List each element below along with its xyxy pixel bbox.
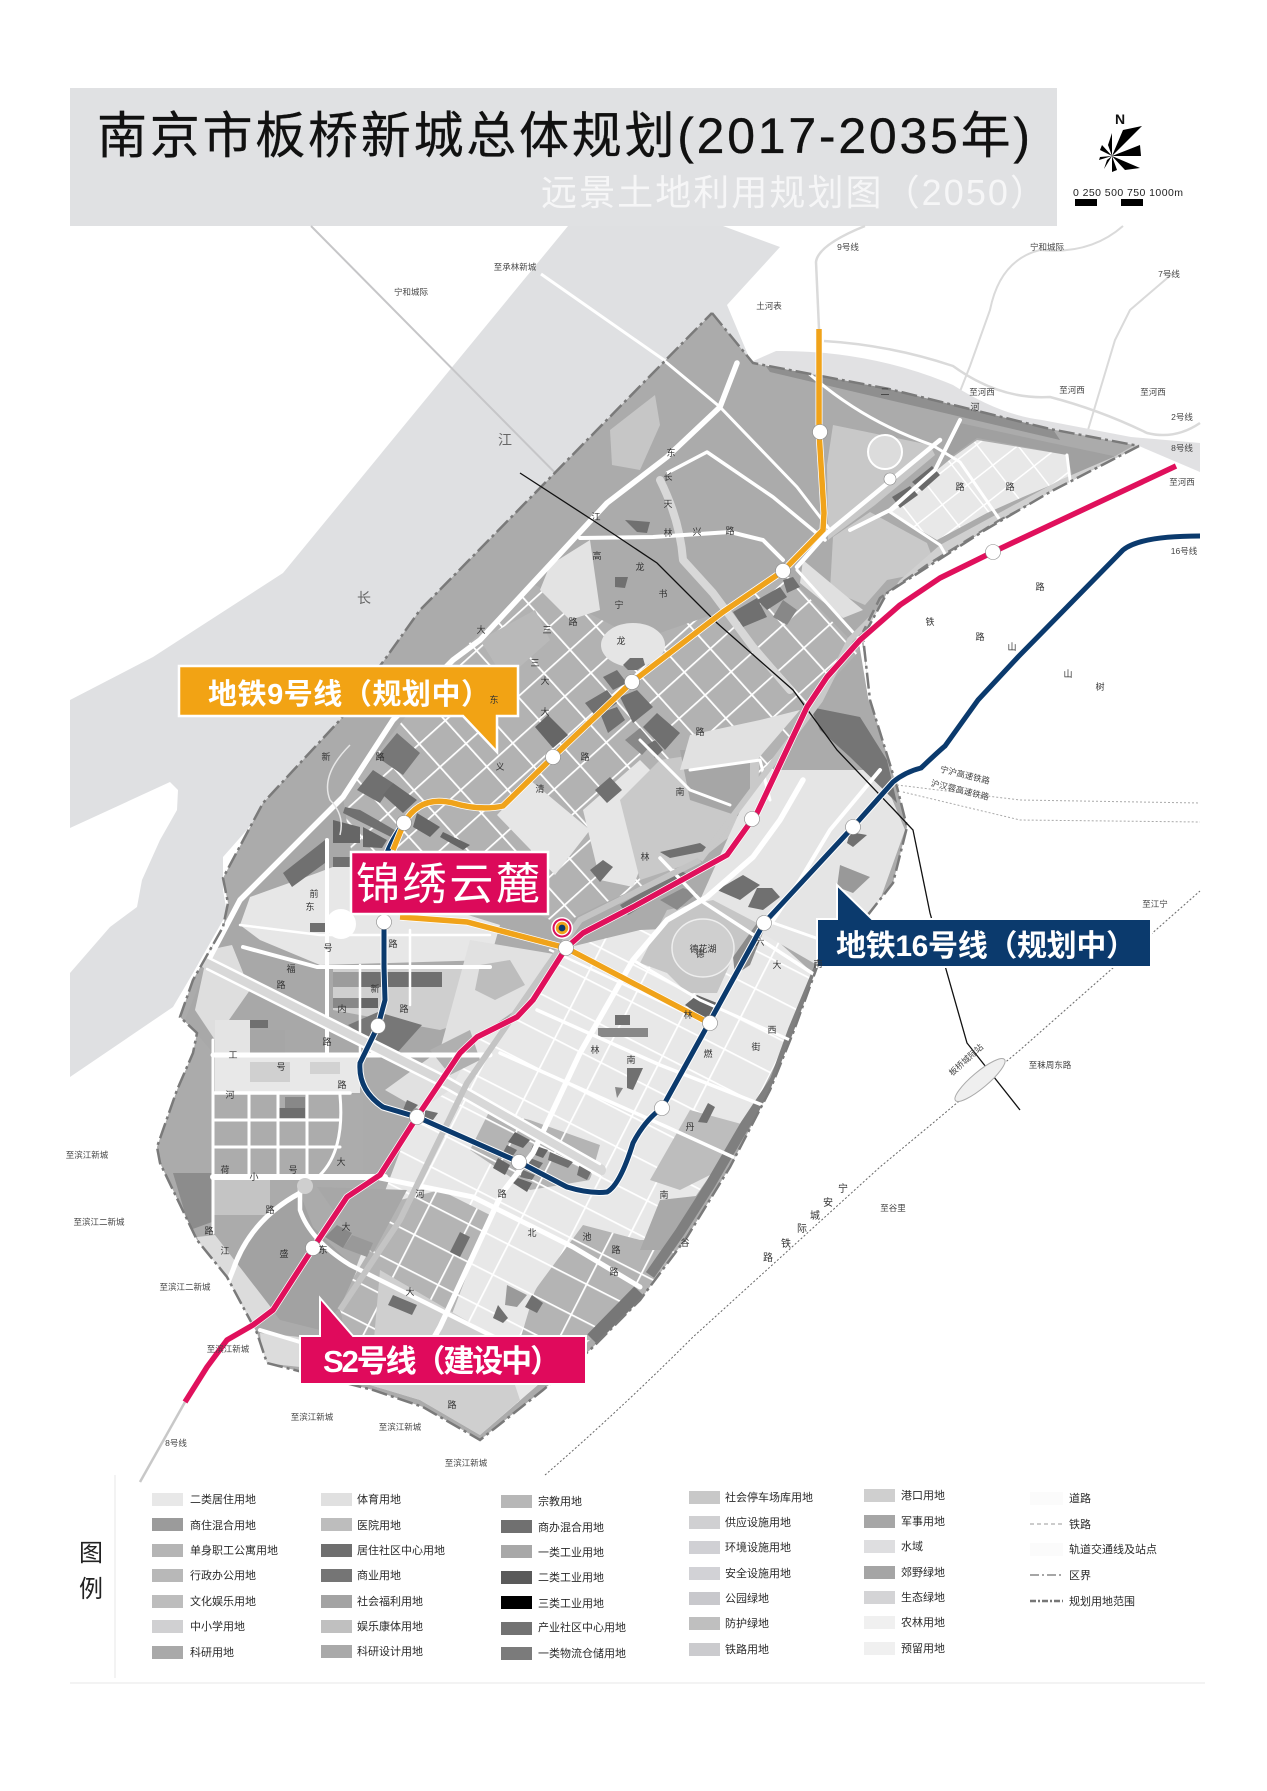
road name labels: 丹 — [685, 1122, 695, 1132]
road name labels: 宁 — [614, 599, 624, 610]
road name labels: 林 — [590, 1044, 600, 1055]
zone: north west light parcel — [540, 540, 600, 620]
outer place labels: 7号线 — [1158, 269, 1180, 279]
outer place labels: 2号线 — [1171, 412, 1193, 422]
legend column 1: 行政办公用地 — [190, 1568, 256, 1582]
road name labels: 路 — [497, 1188, 507, 1199]
zone: north east dark river band — [765, 365, 1060, 440]
legend column 5: 预留用地 — [901, 1642, 945, 1655]
road name labels: 铁 — [925, 616, 935, 627]
legend column 2: 科研设计用地 — [357, 1644, 423, 1658]
road name labels: 小 — [249, 1172, 259, 1182]
legend column 1: 单身职工公寓用地 — [190, 1543, 278, 1557]
road name labels: 树 — [1095, 681, 1105, 692]
zone: north east oval — [868, 435, 902, 469]
road name labels: 路 — [375, 751, 385, 762]
road name labels: 新 — [370, 983, 380, 994]
road name labels: 林 — [683, 1009, 693, 1020]
outer place labels: 至河西 — [1140, 387, 1166, 397]
legend column 3: 二类工业用地 — [538, 1570, 604, 1584]
callout: metro line 9 — [179, 666, 518, 752]
legend column 1: 商住混合用地 — [190, 1518, 256, 1532]
outer place labels: 至河西 — [1169, 477, 1195, 487]
legend column 2: 社会福利用地 — [357, 1594, 423, 1608]
legend column 5: 农林用地 — [901, 1615, 945, 1629]
road name labels: 江 — [591, 512, 601, 522]
high speed rail dotted lines — [889, 784, 1200, 822]
outer place labels: 宁和城际 — [1030, 242, 1064, 252]
river labels: 长 — [357, 590, 371, 606]
legend column 3: 一类物流仓储用地 — [538, 1646, 626, 1660]
callout: line S2: S2号线（建设中） — [323, 1344, 561, 1379]
callout: metro line 16 — [817, 885, 1151, 967]
legend panel rule — [70, 1475, 1205, 1683]
road name labels: 书 — [658, 589, 668, 599]
zone: south east gray grid — [520, 1225, 690, 1340]
road name labels: 德花湖 — [689, 943, 717, 954]
legend column 2: 体育用地 — [357, 1492, 401, 1506]
outer place labels — [66, 242, 1198, 1468]
outer place labels: 至滨江二新城 — [159, 1282, 211, 1292]
east boundary dark strip — [646, 962, 816, 1278]
road name labels: 谷 — [680, 1238, 690, 1248]
legend column 4: 公园绿地 — [725, 1591, 769, 1605]
outer place labels: 至滨江新城 — [207, 1344, 250, 1354]
road name labels: 河 — [415, 1188, 425, 1199]
road name labels: 龙 — [635, 561, 645, 572]
legend column 1: 文化娱乐用地 — [190, 1594, 256, 1608]
road name labels: 路 — [955, 481, 965, 492]
road name labels: 路 — [322, 1036, 332, 1047]
road name labels: 东 — [318, 1244, 328, 1255]
road name labels: 路 — [580, 751, 590, 762]
road name labels: 路 — [388, 938, 398, 949]
white roads — [207, 300, 1080, 1380]
road name labels: 燃 — [703, 1048, 713, 1059]
legend column 2: 医院用地 — [357, 1518, 401, 1532]
dark blocks — [250, 466, 1027, 1323]
road name labels: 盛 — [279, 1248, 289, 1259]
road name labels — [204, 387, 1105, 1410]
intercity rail dotted line — [545, 891, 1200, 1475]
road name labels: 东 — [666, 447, 676, 458]
rail corridor — [340, 446, 1139, 1310]
road name labels: 西 — [767, 1025, 777, 1035]
legend — [70, 1475, 1205, 1683]
legend column 3 — [501, 1494, 626, 1660]
zone: north east of metro 16 light — [700, 770, 905, 965]
road name labels: 路 — [276, 979, 286, 990]
road name labels: 山 — [1007, 642, 1017, 652]
faint roads outside plan area — [140, 226, 1200, 1482]
callout: metro line 16: 地铁16号线（规划中） — [836, 930, 1136, 963]
callout: metro line 9: 地铁9号线（规划中） — [208, 678, 490, 711]
road name labels: 山 — [1063, 669, 1073, 679]
compass and scale bar — [1073, 111, 1183, 206]
zone: south west park wedge — [233, 1193, 357, 1330]
legend column 4: 铁路用地 — [725, 1643, 769, 1656]
road name labels: 南 — [675, 786, 685, 797]
road name labels: 林 — [640, 851, 650, 862]
outer place labels: 至承林新城 — [494, 262, 537, 272]
zone: west mid gray — [346, 818, 351, 849]
metro line 16 — [360, 536, 1200, 1192]
road name labels: 江 — [220, 1246, 230, 1256]
road name labels: 六 — [755, 936, 765, 947]
road name labels: 龙 — [616, 635, 626, 646]
road name labels: 大 — [341, 1221, 351, 1232]
zone: lake outline — [672, 919, 734, 977]
outer place labels: 至滨江新城 — [445, 1458, 488, 1468]
outer place labels: 至河西 — [1059, 385, 1085, 395]
road name labels: 兴 — [692, 527, 702, 537]
zone: south west light corridor — [197, 1235, 271, 1322]
zone: lower rail strip NE — [896, 456, 1114, 585]
map — [66, 226, 1200, 1482]
north letter: N — [1115, 111, 1125, 127]
road name labels: 大 — [336, 1156, 346, 1167]
road name labels: 东 — [305, 901, 315, 912]
road name labels: 清 — [535, 783, 545, 794]
legend column 3: 一类工业用地 — [538, 1545, 604, 1559]
bridge lines over the river — [311, 226, 727, 500]
legend column 6 — [1030, 1491, 1157, 1608]
legend column 4: 社会停车场库用地 — [725, 1490, 813, 1504]
legend column 4: 环境设施用地 — [725, 1540, 791, 1554]
outer place labels: 土河表 — [756, 301, 782, 311]
road name labels: 天 — [663, 499, 673, 509]
intercity rail name — [763, 1182, 848, 1264]
metro stations — [306, 424, 1000, 1256]
plan boundary dash — [157, 313, 1139, 1440]
station hatch: Banqiao intercity — [950, 1053, 1010, 1107]
road name labels: 路 — [204, 1225, 214, 1236]
road name labels: 南 — [659, 1189, 669, 1200]
road name labels: 路 — [1005, 481, 1015, 492]
zone: lower central organic light — [385, 940, 560, 1110]
zone: north river bank — [946, 424, 1114, 474]
zone: north east light parcels — [890, 440, 1070, 540]
road name labels: 河 — [970, 401, 980, 412]
legend column 3: 产业社区中心用地 — [538, 1620, 626, 1634]
outer place labels: 至滨江新城 — [291, 1412, 334, 1422]
river labels — [357, 432, 512, 606]
metro line S2 — [185, 466, 1176, 1402]
legend column 6: 道路 — [1069, 1491, 1091, 1505]
legend column 2: 居住社区中心用地 — [357, 1543, 445, 1557]
intercity rail name: 安 — [823, 1196, 833, 1209]
outer place labels: 板桥城际站 — [947, 1042, 985, 1078]
legend column 4: 防护绿地 — [725, 1616, 769, 1630]
outer place labels: 至滨江新城 — [379, 1422, 422, 1432]
road name labels: 林 — [663, 527, 673, 538]
scale bars — [1075, 199, 1143, 206]
callout: project name: 锦绣云麓 — [356, 860, 540, 909]
outer place labels: 至河西 — [969, 387, 995, 397]
legend column 5: 港口用地 — [901, 1489, 945, 1502]
legend column 6: 区界 — [1069, 1569, 1091, 1582]
zone: central diagonal grid — [343, 571, 860, 925]
road name labels: 池 — [582, 1231, 592, 1242]
road name labels: 北 — [527, 1228, 537, 1238]
legend column 1: 中小学用地 — [190, 1619, 245, 1633]
legend column 6: 轨道交通线及站点 — [1069, 1542, 1157, 1556]
road name labels: 二 — [880, 387, 890, 397]
intercity rail name: 路 — [763, 1251, 773, 1264]
road name labels: 路 — [695, 726, 705, 737]
outer place labels: 至江宁 — [1142, 899, 1168, 909]
zone: row above grid — [215, 1057, 360, 1093]
legend heading: 例 — [79, 1576, 103, 1603]
legend column 2 — [321, 1492, 445, 1658]
road name labels: 荷 — [220, 1165, 230, 1175]
legend column 5: 水域 — [901, 1540, 923, 1553]
legend column 6: 规划用地范围 — [1069, 1594, 1135, 1608]
main title: 南京市板桥新城总体规划(2017-2035年) — [97, 108, 1030, 164]
outer place labels: 8号线 — [165, 1438, 187, 1448]
road name labels: 路 — [725, 525, 735, 536]
road name labels: 路 — [975, 631, 985, 642]
intercity rail name: 际 — [797, 1223, 807, 1235]
outer place labels: 16号线 — [1171, 546, 1198, 556]
road name labels: 新 — [321, 751, 331, 762]
road name labels: 河 — [225, 1089, 235, 1100]
outer place labels: 8号线 — [1171, 443, 1193, 453]
river: Yangtze — [70, 226, 780, 1077]
outer place labels: 至谷里 — [880, 1203, 906, 1213]
roundabout — [297, 1178, 313, 1194]
plan area base — [157, 313, 1139, 1440]
road name labels: 东 — [489, 694, 499, 705]
outer place labels: 沪汉蓉高速铁路 — [930, 778, 991, 802]
road name labels: 路 — [611, 1244, 621, 1255]
legend column 3: 宗教用地 — [538, 1494, 582, 1508]
intercity rail name: 宁 — [838, 1182, 848, 1195]
metro line 9 — [393, 329, 824, 1023]
outer place labels: 9号线 — [837, 242, 859, 252]
road name labels: 三 — [530, 658, 540, 668]
zone: west light core — [240, 860, 500, 965]
legend column 3: 三类工业用地 — [538, 1596, 604, 1610]
compass rose — [1099, 126, 1142, 172]
zone: north park lighter strip — [610, 395, 660, 470]
road name labels: 路 — [568, 616, 578, 627]
road name labels: 前 — [309, 888, 319, 899]
scale labels: 0 250 500 750 1000m — [1073, 187, 1183, 199]
road name labels: 工 — [228, 1050, 238, 1060]
outer place labels: 宁和城际 — [394, 287, 428, 297]
legend column 6: 铁路 — [1069, 1518, 1091, 1531]
zone: south west gray grid — [340, 1190, 490, 1345]
road name labels: 南 — [813, 958, 823, 969]
zone: park around lake — [640, 900, 757, 993]
legend column 1 — [152, 1492, 278, 1659]
zone: south east light grid — [340, 925, 815, 1435]
legend column 4: 安全设施用地 — [725, 1566, 791, 1580]
legend column 5: 生态绿地 — [901, 1590, 945, 1604]
road name labels: 路 — [1035, 581, 1045, 592]
organic park line — [328, 745, 350, 835]
location marker — [551, 917, 573, 939]
legend column 2: 娱乐康体用地 — [357, 1619, 423, 1633]
road name labels: 路 — [399, 1003, 409, 1014]
legend heading — [79, 1540, 103, 1603]
road name labels: 大 — [405, 1286, 415, 1297]
legend column 5 — [864, 1489, 945, 1655]
land use zones clipped to plan area — [173, 300, 1139, 1435]
road name labels: 大 — [772, 959, 782, 970]
subtitle: 远景土地利用规划图（2050） — [541, 172, 1046, 213]
road name labels: 福 — [286, 963, 296, 974]
road name labels: 路 — [337, 1079, 347, 1090]
road name labels: 号 — [323, 943, 333, 953]
legend heading: 图 — [79, 1540, 103, 1567]
big white node — [326, 909, 356, 939]
legend column 4: 供应设施用地 — [725, 1515, 791, 1529]
road name labels: 内 — [337, 1003, 347, 1014]
outer place labels: 宁沪高速铁路 — [939, 764, 991, 786]
legend column 5: 郊野绿地 — [901, 1565, 945, 1579]
road name labels: 街 — [751, 1041, 761, 1052]
zone: north east mid — [827, 425, 935, 540]
road name labels: 号 — [276, 1062, 286, 1072]
black tunnel line — [520, 473, 1020, 1110]
road name labels: 南 — [626, 1054, 636, 1065]
road name labels: 长 — [663, 471, 673, 482]
road name labels: 大 — [540, 675, 550, 686]
legend column 1: 科研用地 — [190, 1645, 234, 1659]
outer place labels: 至秣周东路 — [1029, 1060, 1072, 1070]
road name labels: 三 — [542, 625, 552, 635]
road name labels: 号 — [288, 1165, 298, 1175]
legend column 3: 商办混合用地 — [538, 1520, 604, 1534]
callout: line S2 — [300, 1298, 586, 1384]
road name labels: 德 — [695, 948, 705, 959]
title band — [70, 88, 1057, 226]
zone: west grid — [213, 1095, 363, 1175]
zone: along-yellow light parcels — [497, 780, 590, 875]
intercity rail name: 铁 — [781, 1237, 791, 1250]
road name labels: 路 — [609, 1266, 619, 1277]
road name labels: 路 — [265, 1204, 275, 1215]
outer place labels: 至滨江二新城 — [73, 1217, 125, 1227]
road name labels: 大 — [476, 624, 486, 635]
legend column 4 — [689, 1490, 813, 1656]
legend column 5: 军事用地 — [901, 1515, 945, 1528]
legend column 2: 商业用地 — [357, 1568, 401, 1582]
road name labels: 高 — [592, 550, 602, 561]
zone: strip under core — [333, 969, 462, 1030]
outer place labels: 至滨江新城 — [66, 1150, 109, 1160]
legend column 1: 二类居住用地 — [190, 1492, 256, 1506]
road name labels: 义 — [495, 762, 505, 772]
river: north channel — [751, 351, 1200, 472]
road name labels: 路 — [447, 1399, 457, 1410]
road name labels: 大 — [540, 706, 550, 717]
intercity rail name: 城 — [810, 1210, 820, 1222]
river labels: 江 — [498, 432, 512, 448]
